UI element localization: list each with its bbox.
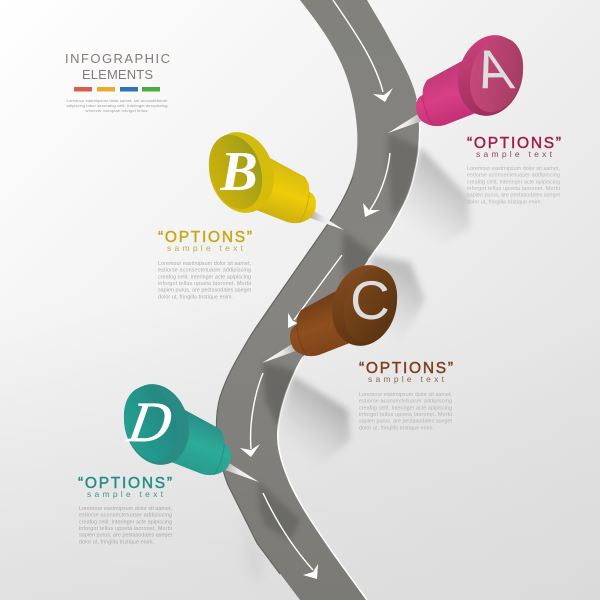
body B (158, 261, 252, 300)
body B: estiorse aconsectetuaser addipiscing (158, 268, 251, 274)
winding road (216, 0, 420, 600)
body C (359, 392, 452, 431)
body A: dolor ut, fringilla tristique enim. (467, 199, 542, 205)
title: INFOGRAPHIC (65, 51, 170, 66)
letter C: C (350, 269, 390, 331)
body D: inforgot tellus upseta laoronet. Morbi (79, 526, 172, 532)
body D: dolor ut, fringilla tristique enim. (79, 539, 154, 545)
subheading A: sample text (476, 149, 553, 159)
title caption: wheever ourupiae infoigot lelius. (86, 108, 148, 113)
road arrow 5 (263, 493, 318, 579)
pin D (115, 376, 259, 482)
body C: sapien purus, are pestasodales aseget (359, 419, 452, 425)
body D: sapien purus, are pestasodales aseget (79, 533, 172, 539)
subheading C: sample text (368, 374, 445, 384)
pin C (262, 257, 406, 363)
pin shadows on road (258, 133, 425, 540)
pin B (200, 124, 344, 230)
body D: creafog celit. Interinger acte apipiscing (79, 519, 172, 525)
title caption: adipiscing tober aecreafog celit. Interinger aeropiscing (66, 103, 168, 108)
body C: estiorse aconsectetuaser addipiscing (359, 399, 452, 405)
letter D: D (123, 391, 176, 454)
heading B: “OPTIONS” (158, 229, 252, 246)
body C: Loremour eastmipsum dolor sit aamet, (359, 392, 452, 398)
heading A: “OPTIONS” (467, 135, 561, 152)
road arrow 1 (333, 0, 393, 102)
option D text (78, 475, 172, 545)
body A: inforgot tellus upseta laoronet. Morbi (467, 186, 560, 192)
option C text (359, 360, 453, 431)
body A: sapien purus, are pestasodales aseget (467, 193, 560, 199)
title caption: Loremour eastmipsum dolor samet, ser aconsdetetuer (66, 98, 168, 103)
body A: estiorse aconsectetuaser addipiscing (467, 173, 560, 179)
heading D: “OPTIONS” (78, 475, 172, 492)
body B: creafog celit. Interinger acte apipiscing (158, 274, 251, 280)
subheading D: sample text (87, 489, 164, 499)
body A: Loremour eastmipsum dolor sit aamet, (467, 166, 560, 172)
body B: Loremour eastmipsum dolor sit aamet, (158, 261, 252, 267)
body C: inforgot tellus upseta laoronet. Morbi (359, 412, 452, 418)
option B text (158, 229, 252, 300)
body D: estiorse aconsectetuaser addipiscing (79, 513, 172, 519)
body D (79, 506, 172, 545)
color legend bars (74, 87, 160, 92)
body C: dolor ut, fringilla tristique enim. (359, 425, 434, 431)
body C: creafog celit. Interinger acte apipiscing (359, 405, 452, 411)
subheading B: sample text (167, 243, 244, 253)
title block (65, 51, 170, 113)
pin A (388, 27, 532, 133)
body B: inforgot tellus upseta laoronet. Morbi (158, 281, 251, 287)
body D: Loremour eastmipsum dolor sit aamet, (79, 506, 172, 512)
body A: creafog celit. Interinger acte apipiscing (467, 179, 560, 185)
body B: dolor ut, fringilla tristique enim. (158, 294, 233, 300)
option A text (467, 135, 561, 205)
heading C: “OPTIONS” (359, 360, 453, 377)
road arrow 4 (240, 373, 263, 457)
road arrow 2 (363, 153, 390, 217)
title caption (66, 98, 168, 113)
pin shadows on paper (240, 148, 470, 585)
subtitle: ELEMENTS (82, 67, 153, 82)
body A (467, 166, 560, 205)
letter B: B (219, 141, 258, 203)
body B: sapien purus, are pestasodales aseget (158, 288, 252, 294)
letter A: A (467, 40, 520, 100)
road arrow 3 (288, 255, 342, 328)
